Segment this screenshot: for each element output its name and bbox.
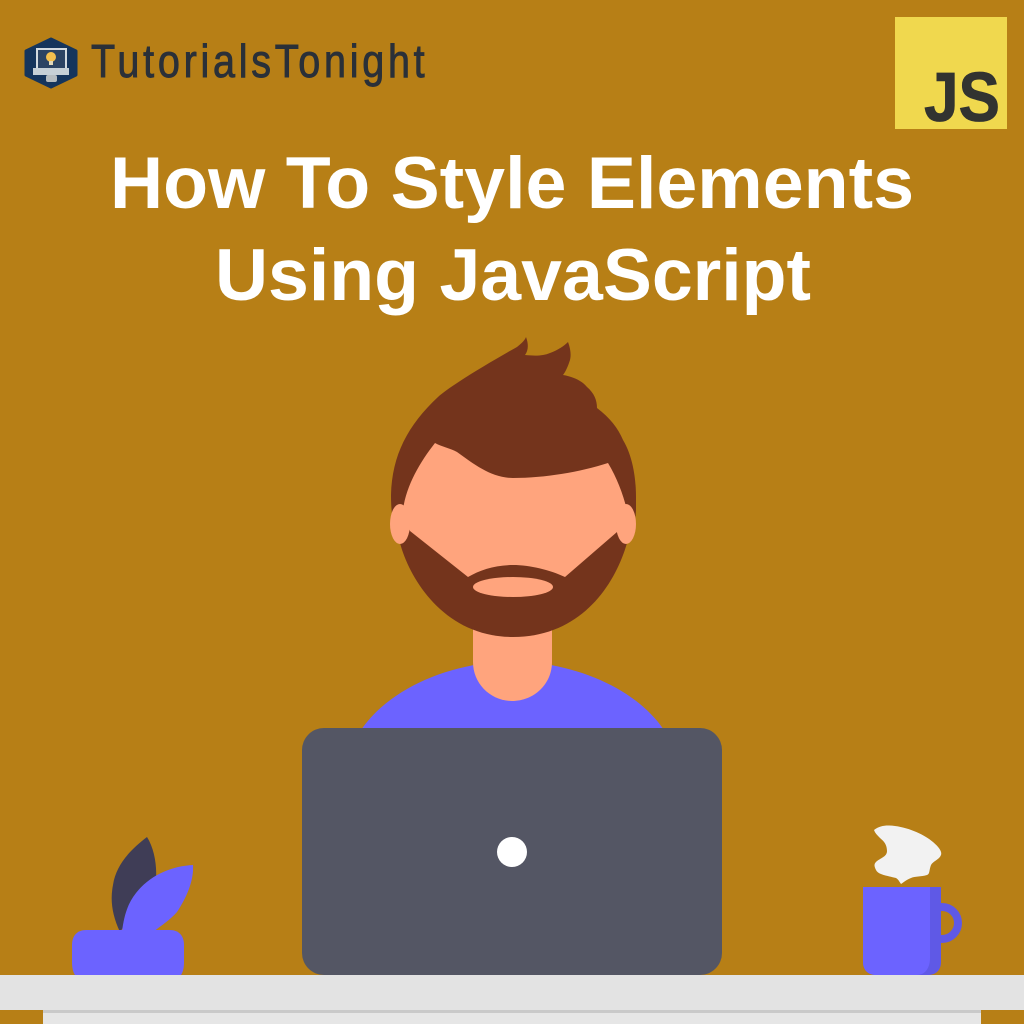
- title: [110, 143, 914, 316]
- mouth: [473, 577, 553, 597]
- pot: [72, 930, 184, 975]
- mug body: [863, 887, 941, 975]
- icon: hexagon laptop with light bulb: [26, 39, 76, 87]
- shirt: [361, 664, 664, 730]
- plant: [72, 837, 193, 975]
- title: Using JavaScript: [215, 235, 811, 316]
- neck: [473, 620, 552, 701]
- desk: [0, 975, 1024, 1024]
- illustration: bearded man: [361, 337, 664, 730]
- mug highlight: [863, 887, 930, 975]
- light leaf: [122, 865, 193, 932]
- face: [403, 443, 627, 577]
- left ear: [390, 504, 410, 544]
- mug handle: [926, 907, 958, 939]
- steam: [874, 825, 941, 884]
- logo: TutorialsTonight: [26, 36, 425, 88]
- title: How To Style Elements: [110, 143, 914, 224]
- coffee mug: [863, 825, 958, 975]
- hair and beard: [391, 337, 636, 637]
- badge: JS logo: JS: [924, 58, 1000, 136]
- logo wordmark: TutorialsTonight: [91, 36, 425, 88]
- dark leaf: [112, 837, 156, 932]
- laptop: [302, 728, 722, 975]
- right ear: [616, 504, 636, 544]
- badge: JS logo: [895, 17, 1007, 136]
